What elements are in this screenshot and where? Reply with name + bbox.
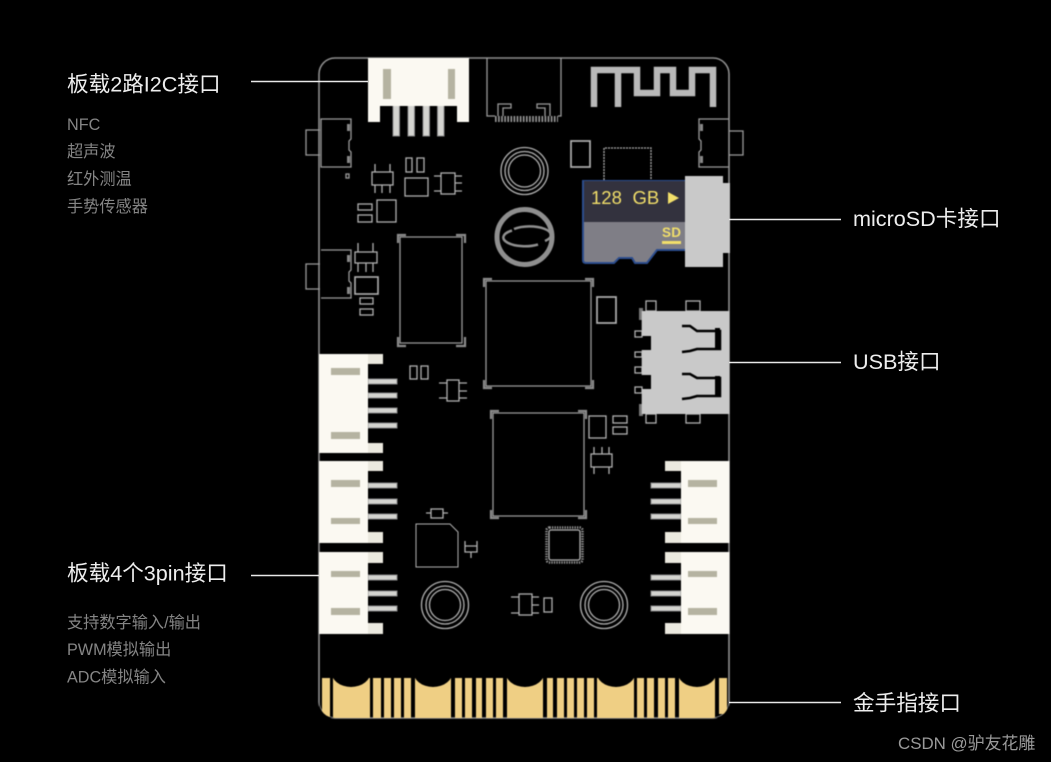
3pin heading: 板载4个3pin接口 [67,560,228,586]
board outline [319,58,729,718]
I2C feature list: 手势传感器 [67,198,148,216]
callout: USB: USB接口 [853,349,941,374]
USB connector [635,301,730,423]
3pin feature list [67,614,201,686]
gold finger connector [319,655,729,718]
chip corner marks [398,235,593,518]
I2C heading: 板载2路I2C接口 [67,72,221,96]
I2C feature list: NFC [67,116,101,134]
left 4-pin connector [319,354,397,453]
logo [497,210,552,264]
I2C leader line [251,80,368,82]
watermark: CSDN @驴友花雕 [898,734,1035,753]
right 3-pin connector B [651,552,730,634]
microSD card: GB [632,187,659,208]
side switches [306,119,743,298]
I2C feature list [67,116,148,216]
chips [400,237,591,516]
play arrow [668,192,679,204]
left 3-pin connector B [319,552,397,634]
right 3-pin connector A [651,461,730,543]
SD mark: SD [662,225,681,240]
I2C feature list: 红外测温 [67,170,132,188]
callout: I2C [67,72,368,216]
USB-C style connector outline [487,58,561,119]
I2C connector [368,58,469,136]
3pin feature list: 支持数字输入/输出 [67,614,201,632]
3pin feature list: PWM模拟输出 [67,641,171,659]
I2C feature list: 超声波 [67,143,116,161]
left 3-pin connector A [319,461,397,543]
small SMD components [355,141,651,615]
capacity text: 128 [591,187,622,208]
antenna [594,70,713,107]
callout: 3pin [67,560,319,686]
PCB board [306,58,743,718]
3pin leader line [251,574,319,576]
callout: microSD: microSD卡接口 [853,206,1001,231]
microSD card [583,176,730,267]
mounting rings [422,148,628,628]
callout: gold finger: 金手指接口 [853,690,961,716]
microSD slot [685,176,730,267]
3pin feature list: ADC模拟输入 [67,668,166,686]
